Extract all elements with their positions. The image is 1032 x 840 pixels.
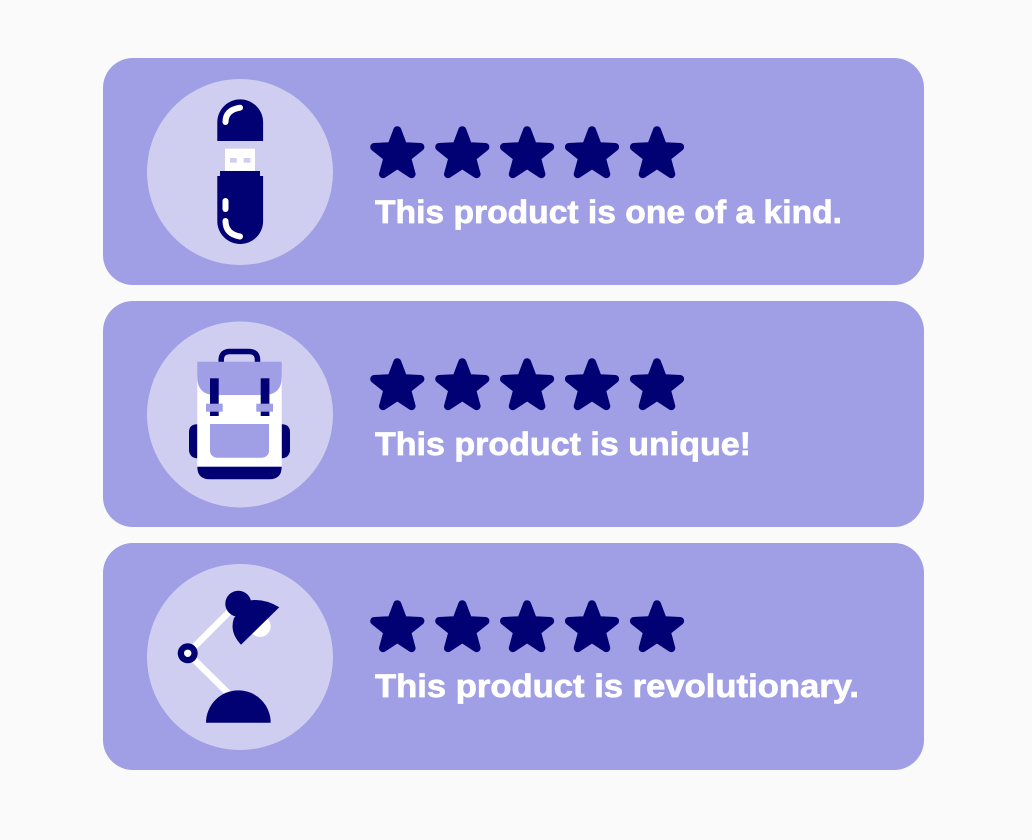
icon circle [147,322,333,508]
panel: backpack review [103,301,924,527]
review text: This product is revolutionary. [375,668,859,704]
icon: desk lamp [178,591,279,723]
panel background [103,58,924,285]
panel: USB drive review [103,58,924,285]
five star rating [374,362,680,406]
icon circle [147,564,333,750]
icon: backpack [189,352,290,479]
icon circle [147,79,333,265]
panel background [103,543,924,770]
panel: desk lamp review [103,543,924,770]
review text: This product is one of a kind. [375,194,842,230]
panel background [103,301,924,527]
five star rating [374,604,680,648]
icon: USB drive [217,99,263,244]
review text: This product is unique! [375,426,751,462]
five star rating [374,130,680,174]
